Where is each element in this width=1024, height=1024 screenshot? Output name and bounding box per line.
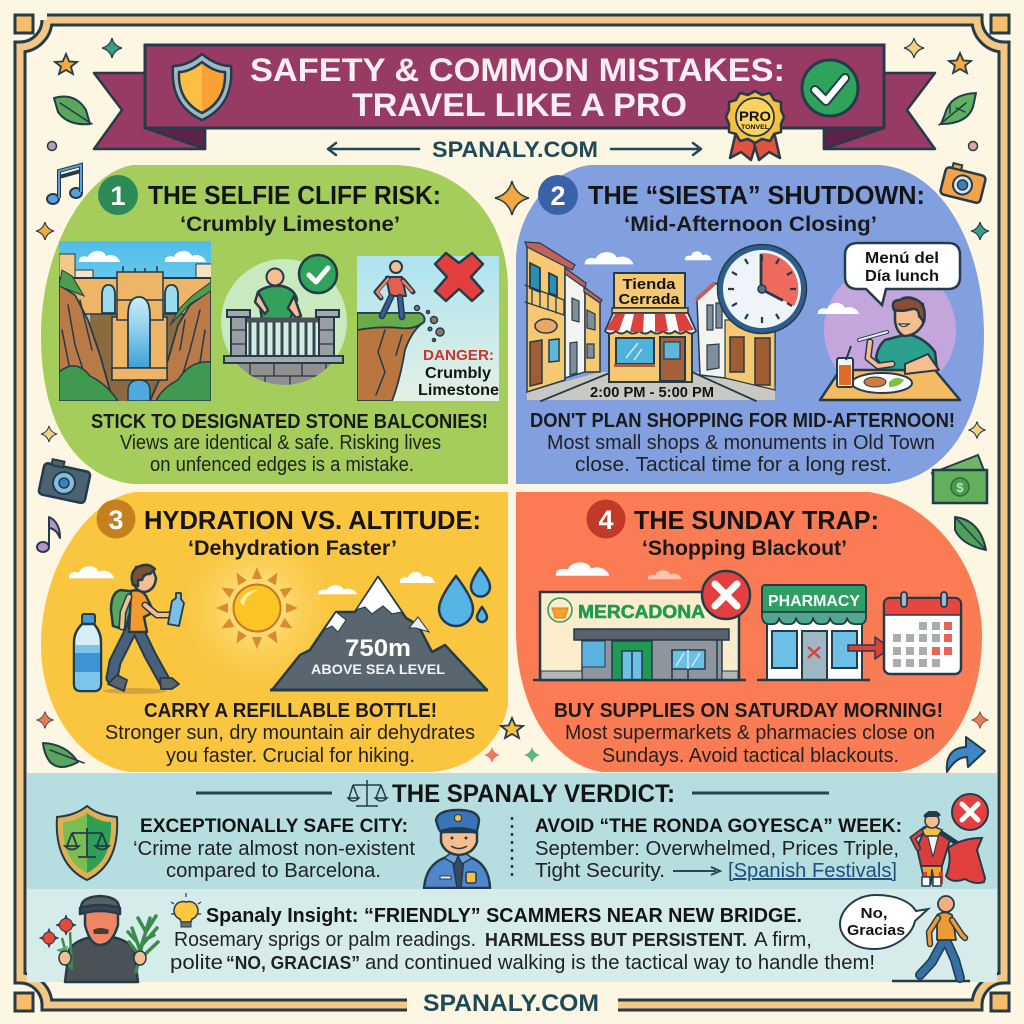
sparkle red (36, 712, 54, 728)
speech bubble: menu del dia lunch (845, 243, 960, 305)
icon: matador (913, 812, 985, 886)
illustration: danger cliff: Crumbly (425, 365, 491, 382)
footer website label: SPANALY.COM (423, 990, 599, 1017)
decorative icons: right margin (904, 38, 989, 772)
dot (48, 142, 56, 150)
number badge 2: 2 (550, 181, 566, 211)
text: spanaly insight: “NO, GRACIAS” (226, 952, 360, 973)
number badge 4 (586, 500, 626, 538)
icon: closed x (702, 571, 750, 619)
panel: 4 sunday trap (516, 492, 982, 772)
panel: 3 hydration vs altitude (41, 492, 508, 772)
illustration: man eating menu del dia (818, 264, 960, 400)
sun glow (167, 518, 347, 698)
callout text 2: DON'T PLAN SHOPPING FOR MID-AFTERNOON! (530, 410, 955, 432)
number badge 3: 3 (108, 505, 124, 535)
icon: clock (718, 244, 806, 334)
icon: leaf (54, 96, 92, 124)
illustration: pharmacy: PHARMACY (768, 593, 860, 610)
icon: camera orange (940, 162, 987, 204)
speech bubble: no gracias: No, (860, 905, 888, 922)
callout text 4: Most supermarkets & pharmacies close on (565, 722, 935, 744)
callout text 1 (91, 411, 488, 476)
illustration: closed street (525, 242, 775, 401)
callout text 4 (554, 700, 943, 767)
clouds (69, 566, 435, 594)
sparkle red center (484, 747, 500, 763)
heading 2: THE “SIESTA” SHUTDOWN: (588, 180, 925, 210)
sparkle center (495, 181, 529, 215)
text: exceptionally safe city: EXCEPTIONALLY SAFE CITY: (140, 816, 408, 837)
callout text 1: STICK TO DESIGNATED STONE BALCONIES! (91, 411, 488, 433)
icon: justice shield (57, 806, 117, 880)
text: avoid the ronda goyesca week: AVOID “THE RONDA GOYESCA” WEEK: (535, 816, 902, 837)
icon: leaf right lower (955, 517, 986, 550)
number badge 1: 1 (110, 181, 126, 211)
sparkle teal (102, 38, 122, 58)
illustration: danger cliff: DANGER: (423, 347, 494, 364)
badge: pro travel (726, 91, 784, 160)
number badge 1 (98, 175, 138, 215)
sparkle small (41, 426, 57, 442)
speech bubble: no gracias: Gracias (847, 922, 905, 939)
number badge 3 (96, 500, 136, 538)
text: exceptionally safe city: compared to Barcelona. (166, 860, 381, 882)
icon: leaf right (939, 93, 976, 125)
website label with arrows (328, 137, 701, 162)
callout text 1: on unfenced edges is a mistake. (150, 454, 414, 476)
illustration: danger cliff: Limestone (418, 382, 499, 399)
star (55, 54, 77, 74)
speech bubble: menu del dia lunch: Menú del (865, 250, 939, 267)
icon: water drops (439, 568, 490, 626)
illustration: walking man (892, 896, 970, 981)
callout text 3: you faster. Crucial for hiking. (166, 745, 415, 767)
icon: money: $ (956, 480, 964, 495)
illustration: mercadona store: MERCADONA (578, 602, 705, 622)
text: exceptionally safe city: ‘Crime rate almost non-existent (133, 838, 415, 860)
badge: pro travel: TONVEL (741, 125, 769, 131)
number badge 2 (538, 175, 578, 215)
panel: 2 siesta shutdown (516, 165, 984, 484)
title banner (94, 45, 935, 149)
icon: music note blue (47, 165, 82, 204)
illustration: safe balcony (221, 254, 347, 385)
subheading 4: ‘Shopping Blackout’ (642, 537, 847, 560)
icon: leaf bottom left (43, 743, 84, 767)
illustration: mountain 750m (270, 577, 488, 690)
sparkle orange (36, 222, 54, 240)
text: spanaly insight: polite (170, 952, 223, 974)
star center (501, 718, 523, 738)
illustration: flower scammer (40, 896, 158, 982)
icon: police officer (424, 810, 490, 888)
heading 1: THE SELFIE CLIFF RISK: (148, 180, 441, 210)
number badge 4: 4 (598, 505, 614, 535)
illustration: mountain 750m: 750m (345, 635, 411, 662)
heading: the spanaly verdict: THE SPANALY VERDICT: (392, 780, 675, 808)
illustration: closed street: 2:00 PM - 5:00 PM (590, 385, 714, 401)
callout text 3: CARRY A REFILLABLE BOTTLE! (144, 700, 437, 722)
icon: money (932, 455, 987, 503)
panel: spanaly insight band (27, 889, 997, 982)
icon: camera dark (38, 458, 92, 504)
illustration: danger cliff (357, 253, 499, 401)
text: spanaly insight (170, 905, 875, 974)
icon: music note purple (37, 517, 60, 552)
text: avoid the ronda goyesca week: September: Overwhelmed, Prices Triple, (535, 838, 899, 860)
left ribbon tail (94, 73, 205, 149)
icon: shield (173, 54, 231, 120)
callout text 3 (105, 700, 475, 767)
title banner: TRAVEL LIKE A PRO (352, 87, 687, 123)
icon: green check (802, 60, 858, 116)
illustration: mercadona store (533, 592, 746, 680)
arrow: curved blue (947, 737, 985, 772)
badge: pro travel: PRO (739, 108, 771, 124)
panel: verdict band (27, 773, 997, 889)
text: exceptionally safe city (133, 816, 415, 882)
website label with arrows: SPANALY.COM (432, 137, 598, 162)
icon: light bulb (171, 893, 201, 927)
text: avoid the ronda goyesca week (535, 816, 902, 882)
callout text 3: Stronger sun, dry mountain air dehydrates (105, 722, 475, 744)
decorative icons: center (484, 181, 540, 763)
text: spanaly insight: A firm, (754, 929, 812, 951)
text: avoid the ronda goyesca week: Tight Security. (535, 860, 665, 882)
illustration: hiker (103, 565, 184, 694)
heading: the spanaly verdict (196, 780, 829, 808)
callout text 4: Sundays. Avoid tactical blackouts. (602, 745, 899, 767)
text: avoid the ronda goyesca week: [Spanish Festivals] (728, 860, 897, 882)
illustration: closed street: Tienda (622, 276, 676, 293)
decorative icons: left margin (36, 38, 122, 767)
heading 4: THE SUNDAY TRAP: (634, 505, 879, 535)
speech bubble: menu del dia lunch: Día lunch (865, 268, 939, 285)
icon: red x (952, 794, 988, 830)
callout text 4: BUY SUPPLIES ON SATURDAY MORNING! (554, 700, 943, 722)
callout text 2 (530, 410, 955, 476)
subheading 1: ‘Crumbly Limestone’ (180, 213, 400, 236)
star right (949, 53, 971, 73)
subheading 2: ‘Mid-Afternoon Closing’ (624, 213, 877, 236)
clouds (556, 562, 682, 579)
text: spanaly insight: and continued walking is the tactical way to handle them! (365, 952, 875, 974)
subheading 3: ‘Dehydration Faster’ (188, 537, 397, 560)
sparkle tan (904, 38, 924, 58)
sparkle red right (972, 712, 988, 728)
sparkle small right (968, 422, 986, 438)
icon: calendar (884, 592, 961, 674)
dot (968, 142, 978, 150)
callout text 2: close. Tactical time for a long rest. (575, 454, 892, 476)
text: spanaly insight: Rosemary sprigs or palm readings. (174, 929, 476, 951)
title banner: SAFETY & COMMON MISTAKES: (250, 52, 785, 88)
sparkle teal right (971, 222, 989, 240)
sparkle green center (524, 747, 540, 763)
illustration: closed street: Cerrada (618, 291, 680, 308)
illustration: mountain 750m: ABOVE SEA LEVEL (311, 661, 445, 677)
speech bubble: no gracias (840, 895, 928, 949)
illustration: Ronda bridge (59, 241, 212, 402)
dotted divider (511, 817, 513, 880)
illustration: pharmacy (757, 585, 870, 680)
panel: 1 selfie cliff risk (41, 165, 508, 484)
arrow: to calendar (848, 637, 890, 659)
text: spanaly insight: HARMLESS BUT PERSISTENT. (485, 929, 747, 950)
callout text 2: Most small shops & monuments in Old Town (547, 432, 935, 454)
text: spanaly insight: Spanaly Insight: “FRIENDLY” SCAMMERS NEAR NEW BRIDGE. (206, 905, 802, 927)
callout text 1: Views are identical & safe. Risking lives (120, 432, 441, 454)
icon: water bottle (74, 614, 101, 691)
heading 3: HYDRATION VS. ALTITUDE: (144, 505, 481, 535)
icon: sun (216, 567, 298, 649)
